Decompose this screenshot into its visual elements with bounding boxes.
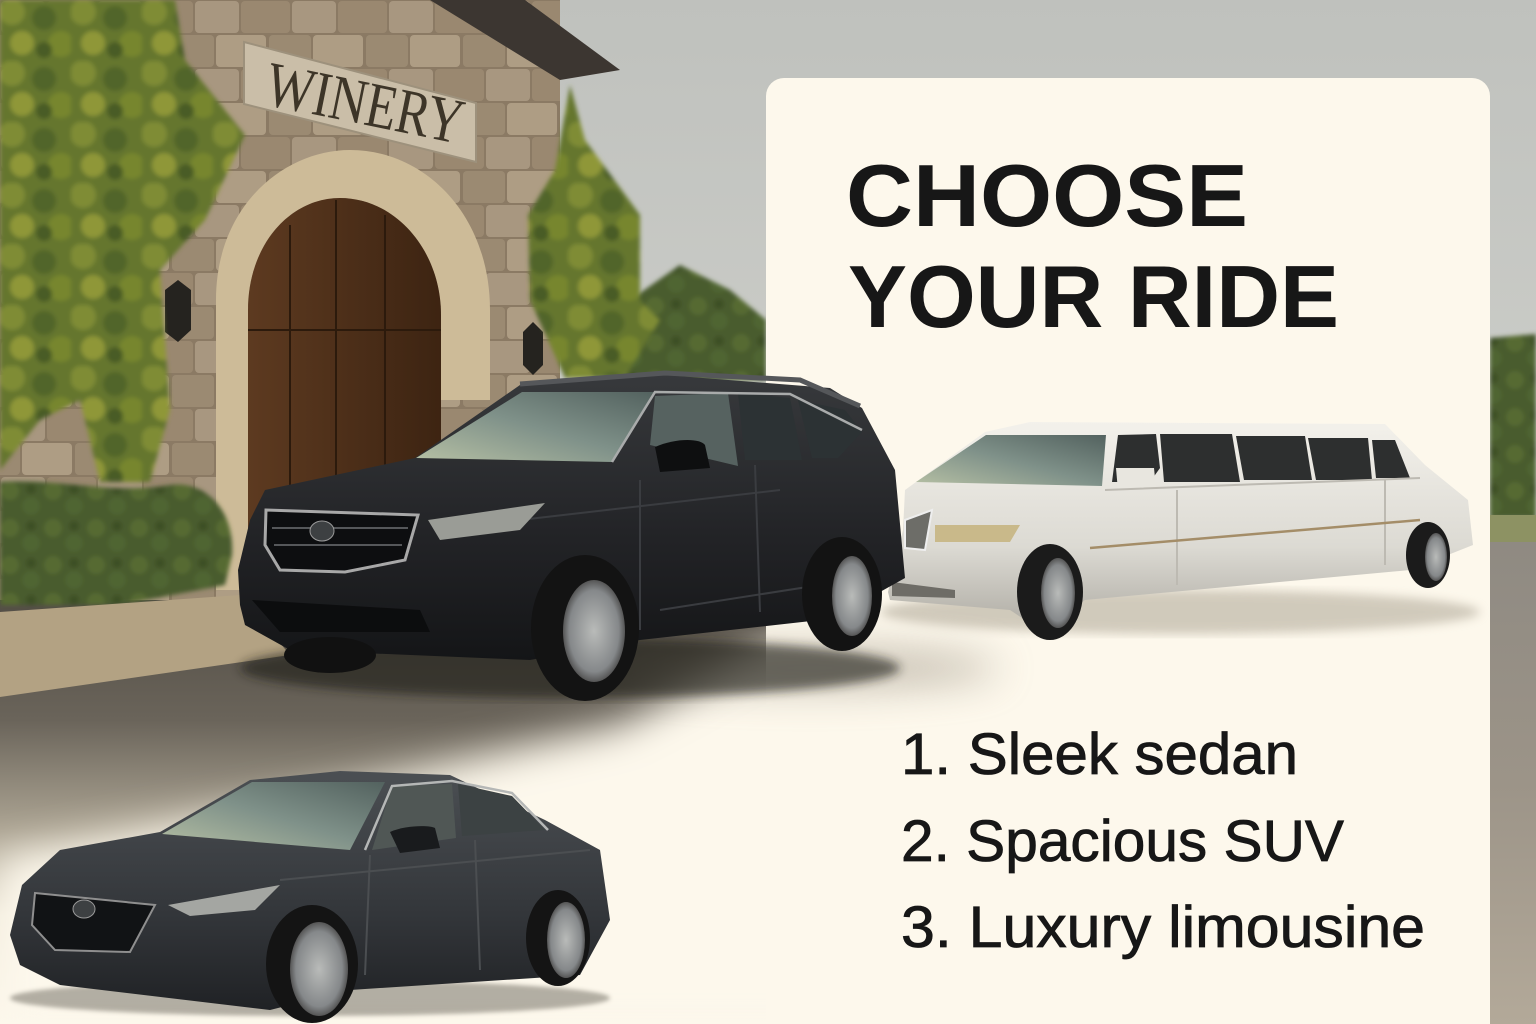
- sedan headlight: [168, 885, 280, 916]
- SUV headlight: [428, 503, 545, 540]
- limousine windshield: [916, 435, 1106, 486]
- ivy right: [528, 85, 660, 378]
- wooden door: [248, 198, 441, 540]
- roof: [430, 0, 620, 80]
- sedan wheels: [266, 890, 590, 1023]
- limousine windows: [1112, 434, 1410, 482]
- SUV wheels: [284, 537, 882, 701]
- stone arch: [216, 150, 490, 590]
- sedan mirror: [390, 826, 440, 853]
- title: YOUR RIDE: [848, 247, 1339, 346]
- SUV grille: [265, 510, 418, 572]
- list item 3: 3. Luxury limousine: [901, 895, 1425, 960]
- SUV door lines: [520, 465, 820, 630]
- list item 2: 2. Spacious SUV: [901, 809, 1344, 874]
- winery building: [0, 0, 620, 600]
- black SUV: [238, 373, 905, 701]
- SUV roof rail: [520, 373, 860, 406]
- winery sign: WINERY: [260, 48, 470, 158]
- background sky: [0, 0, 1536, 700]
- hedge: [0, 481, 232, 605]
- title: CHOOSE: [846, 146, 1248, 245]
- sidewalk: [0, 595, 290, 697]
- title: [846, 146, 1339, 346]
- cream panel: [766, 78, 1490, 1024]
- limousine trim: [1090, 520, 1420, 548]
- ivy left: [0, 0, 245, 482]
- grass strip: [1490, 515, 1536, 543]
- sedan door lines: [280, 840, 590, 975]
- right road strip: [1490, 542, 1536, 1024]
- cream fade over road: [0, 600, 1536, 1024]
- vehicle list: [901, 722, 1425, 960]
- limousine grille: [905, 510, 932, 550]
- wall lantern left: [165, 280, 191, 342]
- limousine door lines: [1105, 478, 1420, 585]
- SUV windshield: [416, 392, 655, 462]
- background trees: [622, 265, 1536, 518]
- sedan windshield: [162, 782, 385, 850]
- white limousine: [880, 422, 1480, 640]
- sleek sedan: [10, 771, 610, 1023]
- road: [0, 590, 1536, 1024]
- limousine mirror: [1116, 468, 1156, 491]
- list item 1: 1. Sleek sedan: [901, 722, 1298, 787]
- soft road edge over panel: [620, 648, 1000, 688]
- wall lantern right: [523, 322, 543, 375]
- SUV lower intake: [252, 600, 430, 632]
- SUV side windows: [650, 393, 738, 466]
- limousine wheels: [1017, 522, 1450, 640]
- SUV mirror: [655, 440, 710, 472]
- sedan grille: [32, 893, 155, 952]
- sedan side windows: [372, 784, 456, 850]
